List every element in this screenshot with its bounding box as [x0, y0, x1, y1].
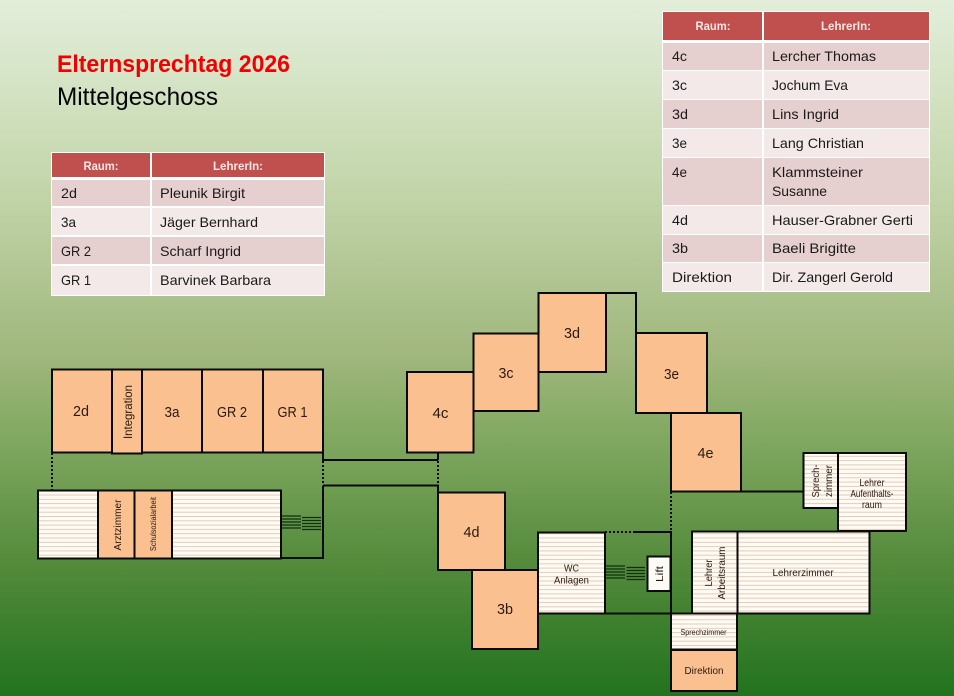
room Direktion [671, 650, 737, 691]
room WC Anlagen [538, 532, 605, 614]
table: left room list: Raum: [84, 159, 118, 173]
room GR 2: GR 2 [217, 404, 247, 421]
floor plan: west lower block [38, 490, 281, 558]
room WC Anlagen: Anlagen [554, 574, 589, 586]
room Sprech-zimmer: Sprech- [810, 464, 822, 498]
floor plan: corridors and walls [52, 293, 803, 692]
table: right room list: 3b [672, 240, 688, 256]
table: left room list: 2d [61, 185, 77, 201]
room Lehrerzimmer [738, 532, 870, 614]
title [57, 51, 290, 111]
stairs: east [606, 566, 645, 580]
room Sprechzimmer [671, 614, 737, 650]
table: left room list: Barvinek Barbara [160, 272, 271, 288]
stairs: west [282, 516, 321, 530]
room GR 1 [263, 370, 323, 452]
table: right room list: 3d [672, 106, 688, 122]
floor plan: central rooms [407, 293, 741, 649]
room 4e [671, 413, 741, 492]
room Schulsozialarbeit: Schulsozialarbeit [149, 496, 158, 551]
table: right room list: Lercher Thomas [772, 48, 876, 64]
table: left room list: Pleunik Birgit [160, 185, 245, 201]
room Arztzimmer [98, 490, 134, 558]
table: left room list: Scharf Ingrid [160, 243, 241, 259]
room GR 1: GR 1 [278, 404, 308, 421]
table: right room list [662, 11, 930, 292]
room 3b [472, 570, 538, 649]
room Integration: Integration [121, 385, 135, 439]
table: right room list: Lins Ingrid [772, 106, 839, 122]
table: left room list: Jäger Bernhard [160, 214, 258, 230]
table: right room list: 4c [672, 48, 687, 64]
room 3e [636, 333, 707, 413]
table: left room list: 3a [61, 214, 76, 230]
room 4c [407, 372, 474, 452]
room GR 2 [202, 370, 263, 452]
table: right room list: Hauser-Grabner Gerti [772, 212, 913, 228]
room Lehrer Aufenthaltsraum: Lehrer [860, 477, 885, 489]
room Integration [112, 370, 142, 454]
room 3b: 3b [497, 601, 513, 618]
title: Elternsprechtag 2026 [57, 51, 290, 78]
room 3c: 3c [498, 365, 514, 382]
room 4d: 4d [464, 524, 480, 541]
room Direktion: Direktion [684, 665, 724, 677]
room 3c [474, 334, 538, 411]
room 4d [438, 492, 505, 570]
room Lehrer Aufenthaltsraum: raum [862, 499, 882, 511]
table: right room list: Lang Christian [772, 135, 864, 151]
room 3d: 3d [564, 325, 580, 342]
room Sprechzimmer: Sprechzimmer [680, 628, 727, 637]
table: right room list: Susanne [772, 183, 827, 199]
table: right room list: 4d [672, 212, 688, 228]
table: left room list: GR 2 [61, 243, 91, 259]
table: right room list: LehrerIn: [821, 19, 871, 33]
table: right room list: 3e [672, 135, 687, 151]
room Sprech-zimmer: zimmer [823, 465, 835, 497]
room 4c: 4c [432, 405, 449, 422]
room Lehrer Arbeitsraum [692, 532, 738, 614]
room Arztzimmer: Arztzimmer [112, 499, 124, 550]
table: right room list: 4e [672, 164, 687, 180]
table: right room list: Baeli Brigitte [772, 240, 856, 256]
table: left room list: LehrerIn: [213, 159, 263, 173]
room Lift [648, 556, 670, 591]
room 3e: 3e [664, 366, 679, 383]
room 3a: 3a [164, 404, 180, 421]
room WC Anlagen: WC [564, 562, 579, 574]
room Lehrerzimmer: Lehrerzimmer [772, 567, 834, 579]
room Lehrer Aufenthaltsraum [838, 453, 906, 531]
table: right room list: Klammsteiner [772, 164, 863, 180]
table: right room list: Raum: [696, 19, 730, 33]
floor plan: west wing [52, 370, 323, 454]
table: right room list: 3c [672, 77, 687, 93]
room Lehrer Arbeitsraum: Arbeitsraum [716, 546, 728, 600]
room 2d: 2d [73, 403, 89, 420]
table: right room list: Dir. Zangerl Gerold [772, 269, 893, 285]
table: left room list: GR 1 [61, 272, 91, 288]
room 3d [538, 293, 606, 372]
table: right room list: Jochum Eva [772, 77, 848, 93]
room Lift: Lift [654, 566, 666, 582]
room Sprech-zimmer [804, 453, 838, 508]
room 4e: 4e [698, 445, 714, 462]
table: left room list [51, 152, 325, 296]
room 3a [142, 370, 202, 452]
title: Mittelgeschoss [57, 83, 218, 111]
room Schulsozialarbeit [134, 490, 172, 558]
table: right room list: Direktion [672, 269, 732, 285]
room Lehrer Aufenthaltsraum: Aufenthalts- [850, 488, 894, 500]
room Lehrer Arbeitsraum: Lehrer [703, 559, 715, 586]
room 2d [52, 370, 112, 452]
